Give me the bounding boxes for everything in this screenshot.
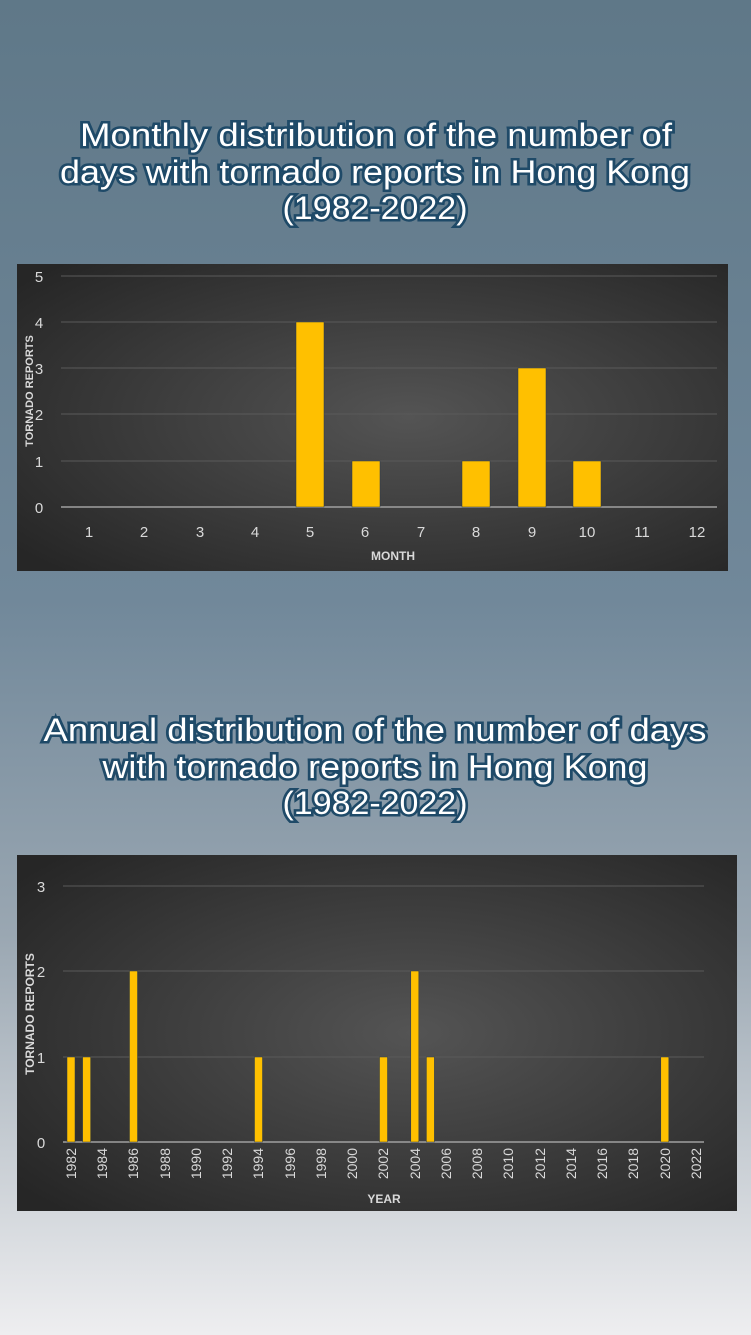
chart: monthly distribution: 6 <box>361 524 369 541</box>
chart: annual distribution: 1982 <box>63 1148 79 1179</box>
chart: annual distribution: 2006 <box>438 1148 454 1179</box>
chart: annual distribution: 1 <box>37 1050 45 1067</box>
chart: annual distribution: 2014 <box>563 1148 579 1179</box>
chart: annual distribution: 1984 <box>94 1148 110 1179</box>
chart: monthly distribution: 0 <box>35 500 43 517</box>
chart: annual distribution: 2000 <box>344 1148 360 1179</box>
chart: monthly distribution: 10 <box>579 524 595 541</box>
chart: annual distribution: 1996 <box>282 1148 298 1179</box>
chart: monthly distribution: 7 <box>417 524 425 541</box>
chart: monthly distribution: 4 <box>35 315 43 332</box>
chart: annual distribution: 1986 <box>125 1148 141 1179</box>
chart: monthly distribution: 4 <box>251 524 259 541</box>
chart: monthly distribution: 5 <box>35 269 43 286</box>
chart: monthly distribution: 2 <box>35 407 43 424</box>
chart: annual distribution: TORNADO REPORTS <box>23 953 37 1075</box>
chart: annual distribution: 1994 <box>250 1148 266 1179</box>
chart: monthly distribution: 3 <box>35 361 43 378</box>
chart: annual distribution: 2022 <box>688 1148 704 1179</box>
chart: annual distribution: 2020 <box>657 1148 673 1179</box>
title: annual: Annual distribution of the number of days <box>44 712 707 748</box>
chart: annual distribution: 0 <box>37 1135 45 1152</box>
chart: annual distribution: 3 <box>37 879 45 896</box>
chart: monthly distribution: 12 <box>689 524 705 541</box>
chart: annual distribution: 2016 <box>594 1148 610 1179</box>
chart: annual distribution: 2008 <box>469 1148 485 1179</box>
chart: annual distribution: 1990 <box>188 1148 204 1179</box>
title: annual <box>44 712 707 821</box>
chart: annual distribution: 2002 <box>375 1148 391 1179</box>
title: annual: with tornado reports in Hong Kong <box>101 749 647 785</box>
chart: annual distribution <box>17 855 737 1211</box>
chart: monthly distribution: 3 <box>196 524 204 541</box>
chart: monthly distribution: 5 <box>306 524 314 541</box>
chart: annual distribution: 2010 <box>500 1148 516 1179</box>
chart: monthly distribution: MONTH <box>371 549 415 563</box>
chart: monthly distribution <box>17 264 728 571</box>
title: monthly: (1982-2022) <box>282 190 468 226</box>
chart: annual distribution: 2004 <box>407 1148 423 1179</box>
title: monthly: days with tornado reports in Hong Kong <box>60 154 690 190</box>
chart: annual distribution: YEAR <box>367 1192 401 1206</box>
chart: annual distribution: 1998 <box>313 1148 329 1179</box>
chart: monthly distribution: 1 <box>35 454 43 471</box>
bars: monthly <box>296 322 601 507</box>
chart: monthly distribution: 9 <box>528 524 536 541</box>
chart: annual distribution: 2018 <box>625 1148 641 1179</box>
title: monthly: Monthly distribution of the number of <box>80 117 672 153</box>
chart: monthly distribution: 1 <box>85 524 93 541</box>
title: monthly <box>60 117 690 226</box>
chart: monthly distribution: 8 <box>472 524 480 541</box>
bars: annual <box>67 971 669 1142</box>
title: annual: (1982-2022) <box>282 785 468 821</box>
chart: annual distribution: 1988 <box>157 1148 173 1179</box>
chart: annual distribution: 2012 <box>532 1148 548 1179</box>
chart: annual distribution: 1992 <box>219 1148 235 1179</box>
chart: monthly distribution: 2 <box>140 524 148 541</box>
chart: monthly distribution: TORNADO REPORTS <box>24 335 36 447</box>
chart: monthly distribution: 11 <box>634 524 650 541</box>
chart: annual distribution: 2 <box>37 964 45 981</box>
